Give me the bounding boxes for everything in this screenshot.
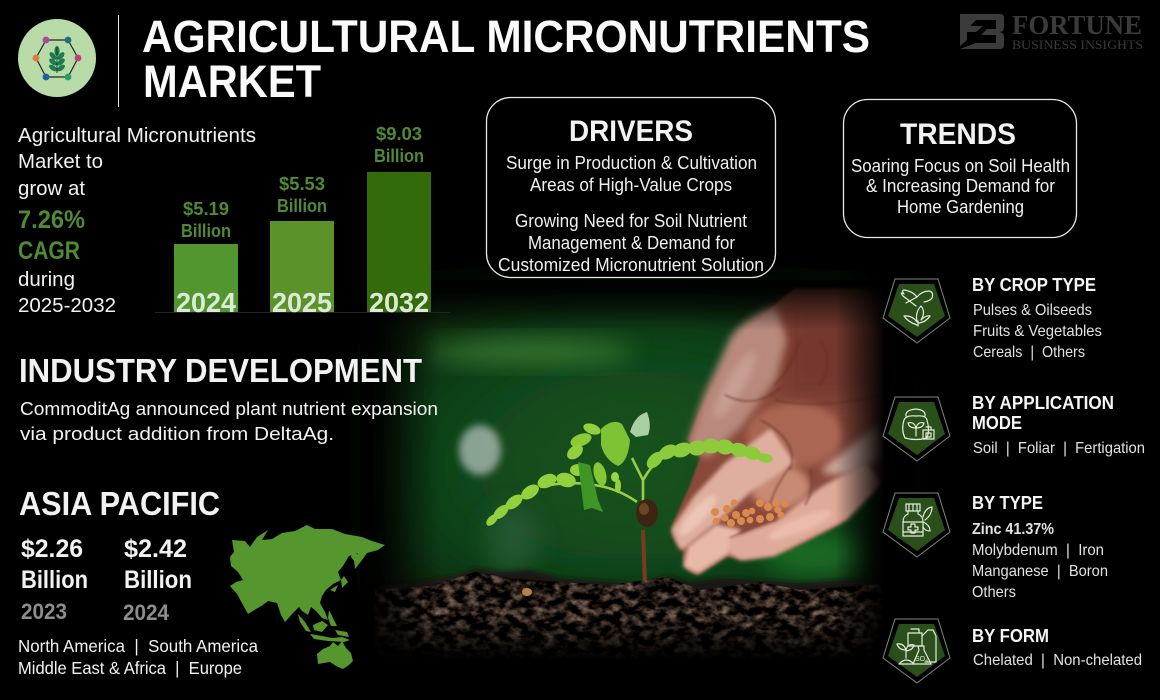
left compound leaf [484, 464, 586, 528]
background photo: hand and seedling [360, 270, 915, 700]
panel: trends: & Increasing Demand for [866, 176, 1055, 196]
bar 2024: Billion [181, 221, 231, 241]
upper finger [692, 310, 783, 454]
hand base [672, 288, 905, 575]
upper palm [780, 307, 880, 400]
regional section: Asia Pacific [18, 485, 258, 678]
panel: trends: TRENDS [900, 118, 1016, 151]
CAGR text block: CAGR [18, 237, 80, 265]
map: Asia Pacific [230, 525, 385, 669]
long finger [675, 433, 790, 546]
icon: bottle with leaf badge [883, 493, 950, 557]
segment: by application mode: MODE [972, 412, 1022, 433]
bar 2024: 2024 [176, 287, 236, 318]
segment: by crop type: Fruits & Vegetables [973, 323, 1102, 340]
segment: by type: Zinc 41.37% [972, 521, 1054, 538]
bar chart: market size by year [155, 124, 450, 318]
panel: drivers: Management & Demand for [528, 233, 735, 253]
segment: by type [883, 492, 1108, 601]
creases [725, 340, 880, 538]
segment: by crop type [883, 274, 1102, 361]
bar 2024 [174, 199, 238, 318]
seedling [484, 412, 774, 584]
panel: trends: Home Gardening [897, 197, 1024, 217]
other regions [18, 636, 258, 678]
title [142, 11, 870, 107]
title: AGRICULTURAL MICRONUTRIENTS [142, 11, 870, 62]
icon: logo circle with hexagon and leaf [18, 19, 96, 97]
panel: drivers: Areas of High-Value Crops [530, 175, 732, 195]
segment: by form: BY FORM [972, 625, 1049, 646]
segment: by application mode [883, 392, 1145, 461]
value 2024 [123, 535, 192, 625]
industry development section: INDUSTRY DEVELOPMENT [19, 352, 422, 389]
photo edge fades [360, 270, 915, 700]
panel: trends: Soaring Focus on Soil Health [851, 156, 1070, 176]
industry development section: via product addition from DeltaAg. [20, 423, 334, 444]
brand logo: Fortune Business Insights: BUSINESS INSIGHTS [1012, 37, 1143, 52]
brand logo: Fortune Business Insights: FORTUNE [1012, 10, 1142, 40]
segment: by crop type: Cereals | Others [973, 344, 1085, 361]
segment: by form [883, 619, 1142, 683]
highlights [708, 348, 762, 422]
industry development section [19, 352, 438, 444]
bar 2025: $5.53 [279, 174, 325, 194]
segment: by type: Manganese | Boron [972, 563, 1108, 580]
palm centre [747, 403, 843, 467]
value 2024: $2.42 [124, 535, 187, 563]
big finger [731, 467, 878, 557]
CAGR text block: Agricultural Micronutrients [18, 124, 256, 147]
other regions: Middle East & Africa | Europe [18, 658, 242, 678]
icon: plant with flask and jug badge: SO₄ [915, 656, 928, 663]
bar 2032 [367, 124, 431, 318]
upper leaflets [564, 412, 650, 512]
lower finger [687, 528, 737, 570]
value 2024: 2024 [123, 600, 170, 625]
right compound leaf [644, 438, 774, 471]
value 2023 [21, 535, 88, 624]
panel: trends [844, 100, 1076, 238]
panel: drivers: DRIVERS [569, 115, 693, 148]
bar 2024: $5.19 [183, 199, 229, 219]
panel: drivers: Customized Micronutrient Solution [498, 255, 764, 275]
CAGR text block: Market to [18, 150, 103, 173]
panel: drivers: Growing Need for Soil Nutrient [515, 211, 747, 231]
value 2023: $2.26 [21, 535, 83, 563]
segment: by type: Others [972, 584, 1016, 601]
value 2023: 2023 [21, 599, 67, 624]
blurred green background [385, 295, 885, 605]
segment: by form: Chelated | Non-chelated [973, 652, 1142, 669]
other regions: North America | South America [18, 636, 258, 656]
segment: by type: BY TYPE [972, 492, 1043, 513]
icon: heart with leaves badge [883, 279, 950, 343]
bar 2025 [270, 174, 334, 318]
segment: by application mode: BY APPLICATION [972, 392, 1114, 413]
segment: by application mode: Soil | Foliar | Fertigation [973, 440, 1145, 457]
segment: by crop type: BY CROP TYPE [972, 274, 1096, 295]
CAGR text block: 2025-2032 [18, 294, 116, 317]
value 2023: Billion [21, 566, 88, 594]
industry development section: CommoditAg announced plant nutrient expansion [20, 398, 438, 419]
brand logo: Fortune Business Insights [960, 10, 1143, 52]
regional section: Asia Pacific: ASIA PACIFIC [19, 485, 220, 522]
bar 2025: 2025 [272, 287, 332, 318]
value 2024: Billion [124, 566, 192, 594]
CAGR text block: during [18, 268, 75, 291]
title: MARKET [143, 56, 321, 107]
bar 2032: Billion [374, 146, 424, 166]
panel: drivers: Surge in Production & Cultivation [506, 153, 757, 173]
bar 2025: Billion [277, 196, 327, 216]
seeds in palm [711, 499, 788, 527]
CAGR text block: grow at [18, 177, 85, 200]
bar 2032: $9.03 [376, 124, 422, 144]
segment: by crop type: Pulses & Oilseeds [973, 302, 1092, 319]
panel: drivers [486, 98, 776, 278]
CAGR text block [18, 124, 256, 317]
segment: by type: Molybdenum | Iron [972, 542, 1104, 559]
icon: fertilizer bag badge [883, 397, 950, 461]
soil [375, 568, 885, 680]
ring finger [826, 430, 888, 472]
bar 2032: 2032 [369, 287, 429, 318]
CAGR text block: 7.26% [18, 206, 85, 234]
hand [672, 288, 905, 575]
icon: plant with flask and jug badge [883, 619, 950, 683]
